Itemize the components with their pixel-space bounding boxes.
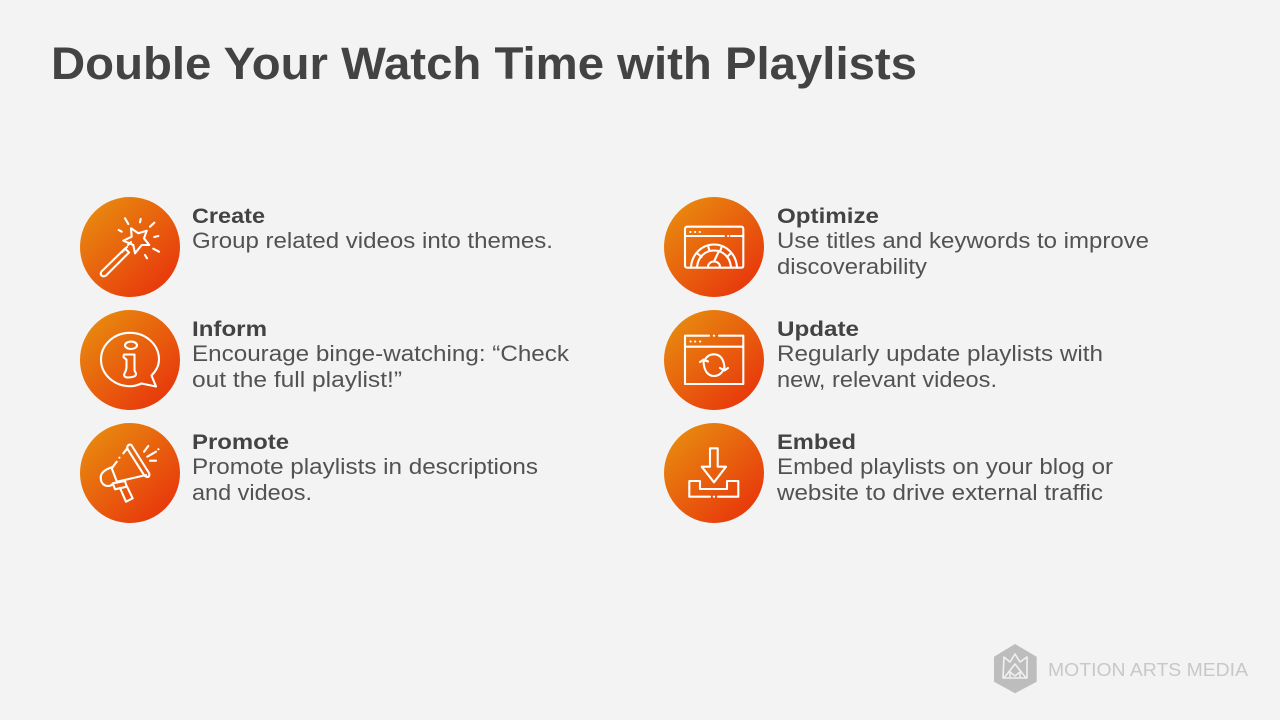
item: Update [664,310,1103,410]
text: Inform description: Encourage binge-watching: “Check [192,341,570,366]
text: Promote description [192,454,538,505]
heading: Create: Create [192,205,265,228]
icon: download to tray [689,448,738,497]
text: Update description: Regularly update playlists with [777,341,1103,366]
text: Promote description: Promote playlists in descriptions [192,454,538,479]
text: Embed description: website to drive external traffic [776,480,1103,505]
icon: megaphone [101,445,158,502]
heading: Embed: Embed [777,431,856,454]
text: Create description: Group related videos into themes. [192,228,553,253]
text: Promote description: and videos. [192,480,312,505]
item: Promote [80,423,538,523]
text: Embed description [776,454,1113,505]
text: Optimize description [777,228,1149,279]
item: Optimize [664,197,1149,297]
icon: magic wand [101,218,159,276]
item: Embed [664,423,1113,523]
title: Double Your Watch Time with Playlists [51,38,917,89]
text: Optimize description: Use titles and keywords to improve [777,228,1149,253]
text: Inform description [192,341,570,392]
text: Optimize description: discoverability [777,254,927,279]
text: Update description: new, relevant videos. [777,367,997,392]
heading: Update: Update [777,318,859,341]
item: Inform [80,310,570,410]
logo mark: hexagon with crown [994,644,1037,693]
heading: Optimize: Optimize [777,205,879,228]
text: Embed description: Embed playlists on your blog or [777,454,1113,479]
icon: browser window with speed gauge [685,227,743,268]
heading: Promote: Promote [192,431,289,454]
item: Create [80,197,553,297]
icon: info speech bubble [101,333,159,386]
text: Update description [777,341,1103,392]
icon: browser window with refresh arrows [685,336,743,384]
logo: Motion Arts Media [994,644,1248,693]
heading: Inform: Inform [192,318,267,341]
text: Inform description: out the full playlist!” [192,367,402,392]
logo wordmark: MOTION ARTS MEDIA [1048,660,1248,680]
